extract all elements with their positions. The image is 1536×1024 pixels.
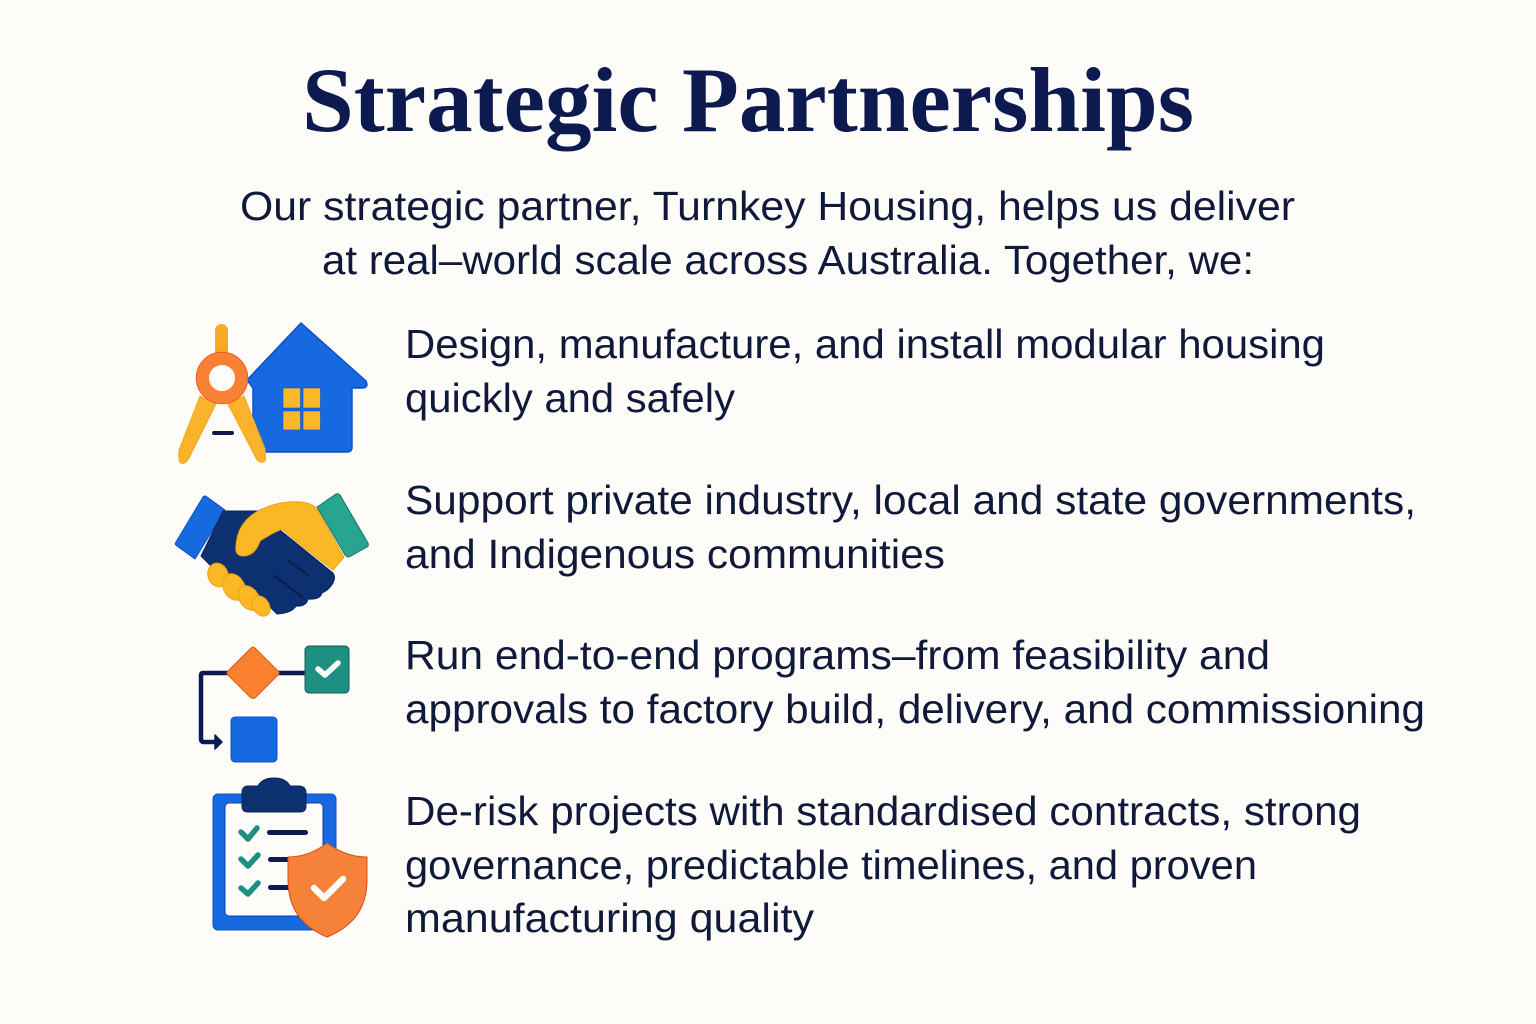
statement 2: Support private industry, local and state governments, — [405, 477, 1416, 523]
statement 4: governance, predictable timelines, and proven — [405, 842, 1257, 888]
icon: process flow — [201, 646, 349, 762]
statement 1 — [405, 321, 1325, 421]
statement 3: Run end-to-end programs–from feasibility and — [405, 632, 1270, 678]
statement 3: approvals to factory build, delivery, and commissioning — [405, 686, 1425, 732]
title: Strategic Partnerships — [302, 49, 1194, 151]
statement 2 — [405, 477, 1416, 577]
icon: clipboard and shield — [213, 778, 367, 937]
intro text: Our strategic partner, Turnkey Housing, helps us deliver — [240, 183, 1295, 229]
statement 2: and Indigenous communities — [405, 531, 945, 577]
statement 4 — [405, 788, 1361, 941]
statement 4: manufacturing quality — [405, 895, 815, 941]
intro text: at real–world scale across Australia. Together, we: — [322, 237, 1254, 283]
statement 3 — [405, 632, 1425, 732]
icon: handshake — [175, 494, 368, 620]
statement 1: Design, manufacture, and install modular housing — [405, 321, 1325, 367]
intro text — [240, 183, 1295, 283]
icon: compass and house — [179, 323, 367, 464]
statement 4: De-risk projects with standardised contracts, strong — [405, 788, 1361, 834]
statement 1: quickly and safely — [405, 375, 736, 421]
